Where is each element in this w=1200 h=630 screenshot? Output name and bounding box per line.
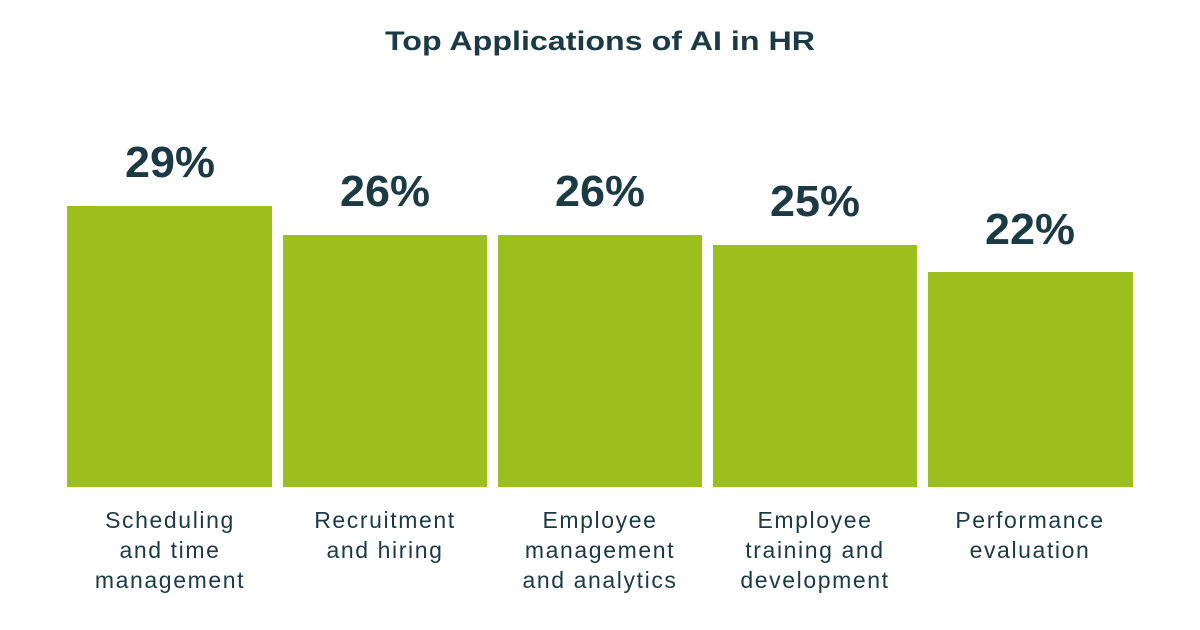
category labels <box>95 507 1105 593</box>
value: 26%: 26% <box>340 167 430 216</box>
value: 25%: 25% <box>770 177 860 226</box>
title: Top Applications of AI in HR <box>385 26 815 56</box>
bar chart <box>67 206 1133 487</box>
label: scheduling: Scheduling <box>105 507 235 533</box>
value labels <box>125 138 1075 254</box>
bar: performance 22% <box>928 272 1133 487</box>
value: 22%: 22% <box>985 205 1075 254</box>
label: recruitment: and hiring <box>326 537 444 563</box>
label: employee management: and analytics <box>522 567 678 593</box>
bar: employee management 26% <box>498 235 702 487</box>
label: performance: evaluation <box>970 537 1090 563</box>
label: performance: Performance <box>955 507 1105 533</box>
label: training: Employee <box>757 507 873 533</box>
label: scheduling: management <box>95 567 245 593</box>
label: employee management: management <box>525 537 675 563</box>
bar: scheduling 29% <box>67 206 272 487</box>
bar: training 25% <box>713 245 917 487</box>
value: 29%: 29% <box>125 138 215 187</box>
label: recruitment: Recruitment <box>314 507 456 533</box>
label: training: training and <box>745 537 885 563</box>
label: training: development <box>740 567 890 593</box>
bar: recruitment 26% <box>283 235 487 487</box>
value: 26%: 26% <box>555 167 645 216</box>
label: employee management: Employee <box>542 507 658 533</box>
label: scheduling: and time <box>119 537 221 563</box>
